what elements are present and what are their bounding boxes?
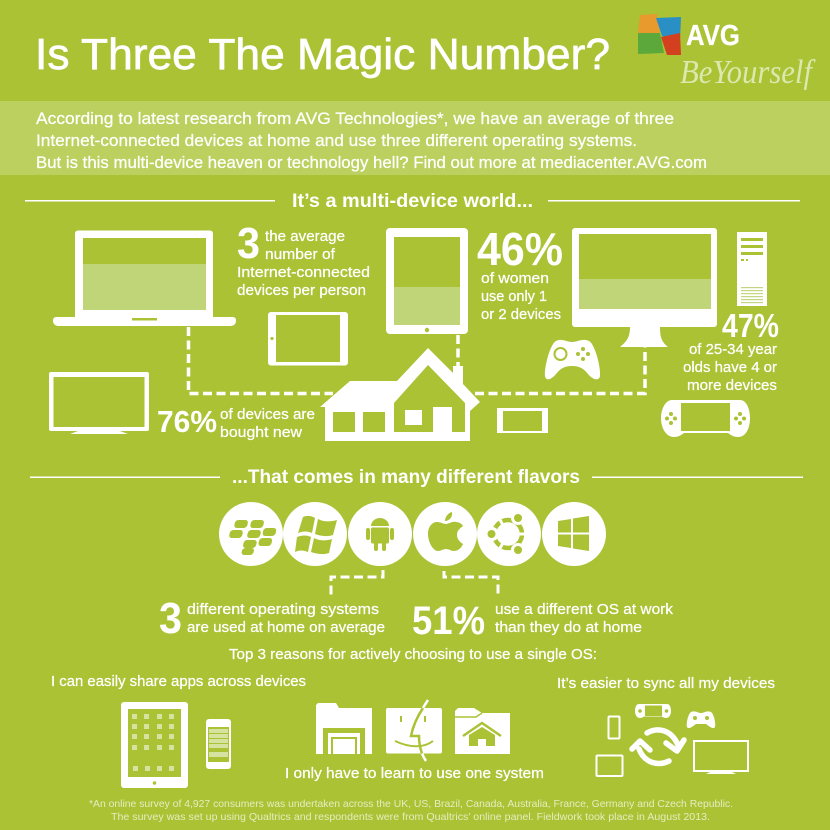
logo tagline: BeYourself bbox=[680, 54, 816, 91]
stat: 47% of 25-34 year olds: more devices bbox=[687, 377, 777, 394]
stat: 46% of women: 46% bbox=[477, 223, 563, 275]
heading: multi-device world: It’s a multi-device world... bbox=[292, 191, 533, 212]
icon: Windows flag bbox=[283, 502, 347, 566]
icon: small controller bbox=[687, 711, 715, 728]
icon group: synced devices bbox=[596, 704, 748, 776]
stat: 3 devices per person: Internet-connected bbox=[237, 264, 370, 281]
icon: phone with apps bbox=[206, 719, 231, 769]
stat: 3 operating systems: are used at home on average bbox=[187, 619, 385, 636]
dashed connector: tablet to house bbox=[456, 335, 460, 366]
icon: phone outline bbox=[608, 716, 620, 738]
icon: monitor bbox=[572, 228, 717, 347]
icon: home folder bbox=[455, 708, 510, 754]
icon: handheld console bbox=[661, 400, 750, 437]
icon: small tablet bbox=[268, 312, 348, 366]
stat: 3 devices per person: devices per person bbox=[237, 282, 366, 299]
icon: folder with garage bbox=[316, 703, 372, 754]
stat: 46% of women: of women bbox=[481, 270, 549, 287]
intro text bbox=[36, 109, 707, 172]
icon: Apple bbox=[413, 502, 477, 566]
icon: house bbox=[320, 348, 480, 441]
intro text: According to latest research from AVG Technologies*, we have an average of three bbox=[36, 109, 674, 128]
reason 1 label: I can easily share apps across devices bbox=[51, 673, 306, 690]
icon: tablet with apps bbox=[121, 702, 188, 788]
footnote: The survey was set up using Qualtrics and respondents were from Qualtrics’ online panel. Fieldwork took place in August 2013. bbox=[111, 811, 710, 823]
stat: 3 devices per person: the average bbox=[265, 228, 345, 245]
stat: 3 devices per person bbox=[237, 219, 370, 299]
icon: Android bbox=[348, 502, 412, 566]
dashed connector: Apple to 51% bbox=[444, 571, 498, 597]
stat: 47% of 25-34 year olds: of 25-34 year bbox=[689, 341, 777, 358]
icon: phone landscape bbox=[497, 408, 548, 433]
icon: small handheld console bbox=[635, 704, 671, 718]
stat: 76% bought new: bought new bbox=[220, 424, 302, 441]
icon: small television bbox=[694, 741, 748, 774]
stat: 46% of women: use only 1 bbox=[481, 288, 547, 305]
stat: 3 operating systems bbox=[159, 594, 385, 643]
stat: 47% of 25-34 year olds: olds have 4 or bbox=[683, 359, 777, 376]
icon: small tablet outline bbox=[596, 756, 622, 776]
icon: Windows 8 bbox=[542, 502, 606, 566]
stat: 46% of women bbox=[477, 223, 563, 323]
stat: 47% of 25-34 year olds: 47% bbox=[722, 307, 779, 344]
stat: 51% different OS: 51% bbox=[412, 599, 485, 643]
icon: laptop bbox=[53, 230, 236, 326]
stat: 76% bought new: 76% bbox=[157, 404, 217, 439]
stat: 51% different OS: than they do at home bbox=[495, 619, 642, 636]
dashed connector: Android to 3 operating systems bbox=[331, 570, 383, 597]
footnote bbox=[89, 798, 733, 823]
stat: 3 devices per person: 3 bbox=[237, 219, 260, 268]
icon: AVG squares bbox=[638, 14, 681, 55]
stat: 3 operating systems: different operating systems bbox=[187, 601, 379, 618]
dashed connector: monitor to house bbox=[475, 346, 645, 394]
subheading: top 3 reasons: Top 3 reasons for actively choosing to use a single OS: bbox=[229, 646, 597, 663]
OS icons row bbox=[219, 502, 606, 566]
title: Is Three The Magic Number? bbox=[35, 30, 610, 79]
stat: 76% bought new: of devices are bbox=[220, 406, 315, 423]
stat: 76% bought new bbox=[157, 404, 315, 441]
reason 3 label: It’s easier to sync all my devices bbox=[557, 675, 775, 692]
heading: many different flavors: ...That comes in many different flavors bbox=[232, 467, 580, 488]
intro text: Internet-connected devices at home and use three different operating systems. bbox=[36, 131, 637, 150]
icon: Finder bbox=[386, 700, 442, 761]
intro band bbox=[0, 101, 830, 175]
AVG logo bbox=[638, 14, 816, 91]
icon: game controller bbox=[545, 340, 600, 379]
icon: television bbox=[49, 372, 149, 434]
footnote: *An online survey of 4,927 consumers was undertaken across the UK, US, Brazil, Canada, Australia, France, Germany and Czech Republic. bbox=[89, 798, 733, 810]
icon: sync arrows bbox=[632, 730, 684, 763]
stat: 51% different OS: use a different OS at work bbox=[495, 601, 674, 618]
icon: BlackBerry bbox=[219, 502, 283, 566]
icon: tablet bbox=[386, 228, 468, 334]
intro text: But is this multi-device heaven or technology hell? Find out more at mediacenter.AVG.com bbox=[36, 153, 707, 172]
stat: 51% different OS bbox=[412, 599, 674, 643]
icon: computer tower bbox=[737, 232, 767, 306]
icon: Ubuntu bbox=[477, 502, 541, 566]
stat: 46% of women: or 2 devices bbox=[481, 306, 561, 323]
stat: 3 operating systems: 3 bbox=[159, 594, 182, 643]
stat: 47% of 25-34 year olds bbox=[683, 307, 779, 394]
reason 2 label: I only have to learn to use one system bbox=[285, 765, 544, 782]
dashed connector: laptop to house bbox=[188, 327, 333, 394]
logo wordmark: AVG bbox=[686, 20, 740, 52]
stat: 3 devices per person: number of bbox=[265, 246, 336, 263]
